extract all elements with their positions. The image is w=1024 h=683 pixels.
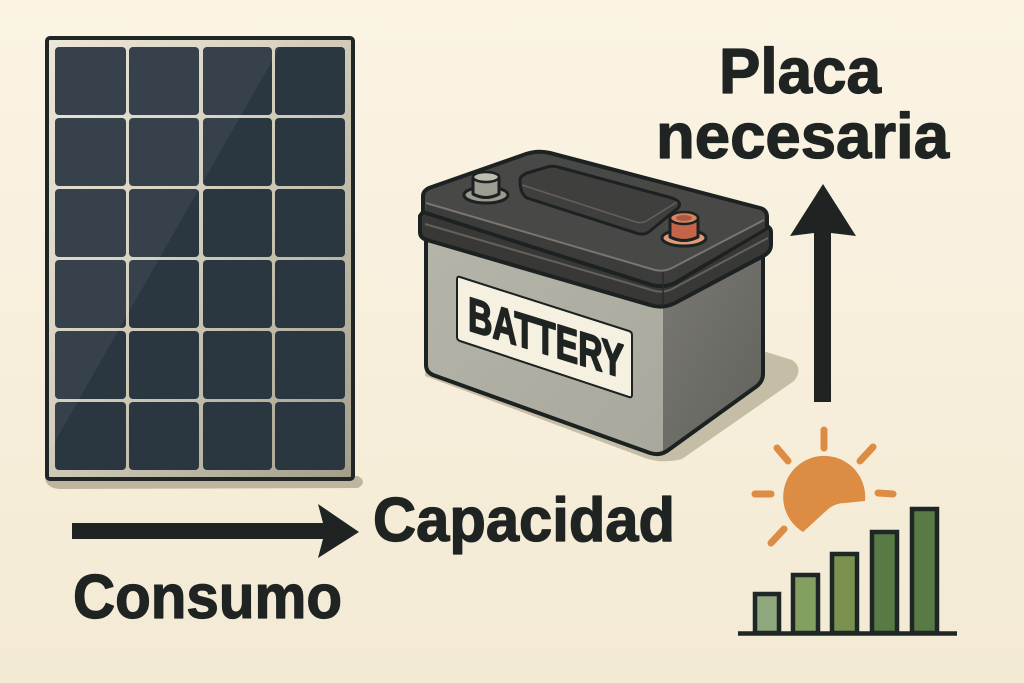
negative terminal (464, 172, 508, 203)
battery left face (426, 240, 663, 455)
battery lid top (423, 152, 767, 286)
battery body outline (426, 240, 763, 454)
battery label text: BATTERY (468, 288, 624, 389)
battery label (457, 277, 632, 397)
arrow: right (72, 504, 359, 558)
arrow: up (790, 184, 856, 402)
battery right face (663, 250, 763, 454)
heading: Placa necesaria: Placa (719, 35, 881, 107)
positive terminal (662, 212, 706, 246)
panel shadow (45, 476, 363, 489)
battery shadow (425, 350, 799, 461)
front edge lid (662, 272, 664, 306)
lid front facet (426, 204, 765, 284)
label: Capacidad: Capacidad (373, 486, 675, 555)
panel cells (55, 47, 345, 470)
panel glare (49, 40, 284, 452)
heading: Placa necesaria: necesaria (656, 100, 949, 172)
battery (420, 152, 799, 461)
panel frame (47, 38, 353, 479)
bar chart (738, 509, 957, 634)
battery lid band (420, 212, 771, 307)
icon: sun (755, 430, 893, 543)
lid highlight (426, 203, 764, 271)
heading: Placa necesaria (656, 35, 949, 172)
label: Consumo: Consumo (73, 563, 342, 632)
cap highlight (522, 185, 677, 223)
lid cap (520, 166, 680, 234)
band highlight (425, 224, 768, 292)
solar panel (45, 38, 363, 489)
